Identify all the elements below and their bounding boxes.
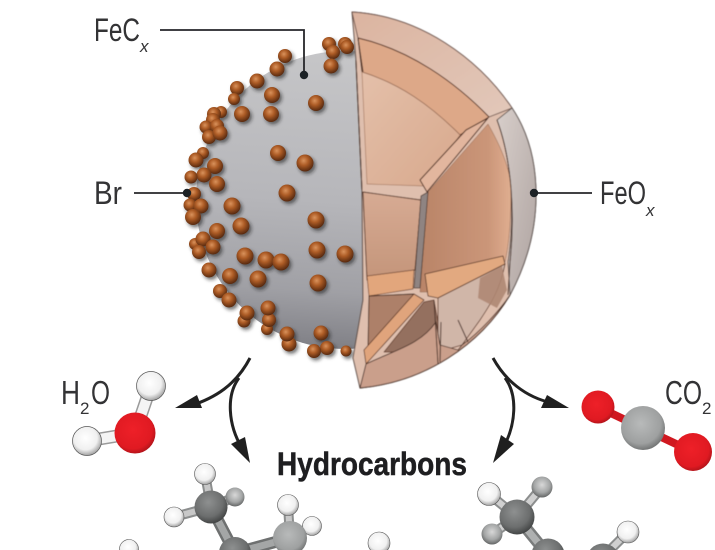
label: FeOx with leader bbox=[530, 175, 655, 220]
lower orange strut bbox=[364, 294, 424, 364]
shell right grey panel bbox=[497, 108, 536, 295]
shell seams bbox=[356, 38, 512, 364]
diagonal strut bbox=[420, 118, 488, 192]
molecule: carbon dioxide bbox=[582, 390, 712, 471]
shell top panel bbox=[352, 12, 512, 117]
lower-left panel bbox=[363, 192, 421, 280]
lower pale segment bbox=[438, 264, 505, 352]
label: CO2: 2 bbox=[702, 399, 711, 418]
arrows: to H2O and hydrocarbons bbox=[175, 358, 250, 463]
label: H2O: 2 bbox=[80, 399, 89, 418]
label: H2O: O bbox=[91, 374, 110, 411]
iron carbide bromide particles bbox=[184, 37, 354, 358]
bottom shell band bbox=[360, 295, 510, 388]
right centre panel bbox=[420, 124, 511, 292]
centre dark wedge bbox=[384, 300, 438, 352]
label: FeOx with leader: x bbox=[645, 201, 655, 220]
molecule: left hydrocarbon bbox=[120, 464, 390, 550]
label: FeCx with leader: FeC bbox=[94, 12, 140, 48]
molecule: right hydrocarbon bbox=[478, 476, 639, 550]
label: Br with leader bbox=[94, 175, 191, 211]
molecule: water bbox=[72, 372, 166, 456]
FeOx shell cutaway bbox=[352, 12, 536, 388]
orange inner band bbox=[358, 38, 489, 135]
right orange shelf bbox=[425, 256, 505, 298]
grey vertical strut bbox=[414, 192, 428, 288]
label: CO2: CO bbox=[665, 374, 702, 411]
dark lower panel bbox=[368, 294, 414, 350]
label: FeCx with leader bbox=[94, 12, 308, 79]
translucent dark dome bbox=[478, 266, 507, 308]
label: H2O bbox=[61, 374, 110, 418]
arrows: to CO2 and hydrocarbons bbox=[493, 358, 569, 463]
nanoparticle sphere: FeCx core bbox=[196, 51, 494, 349]
label: FeOx with leader: FeO bbox=[600, 175, 646, 211]
left orange shelf bbox=[367, 270, 414, 296]
upper inner panel bbox=[362, 72, 460, 186]
heading: Hydrocarbons: Hydrocarbons bbox=[277, 446, 467, 482]
label: H2O: H bbox=[61, 374, 80, 411]
label: Br with leader: Br bbox=[94, 175, 122, 211]
label: FeCx with leader: x bbox=[139, 37, 149, 56]
shell outer silhouette bbox=[352, 12, 536, 388]
